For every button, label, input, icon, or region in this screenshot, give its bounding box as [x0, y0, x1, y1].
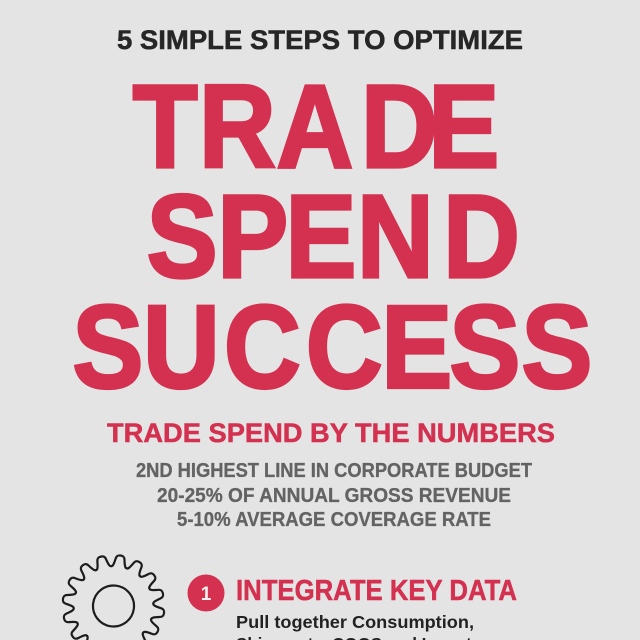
step 1 heading: INTEGRATE KEY DATA	[236, 575, 517, 607]
main title: TRADE	[133, 60, 499, 192]
step 1 description: Pull together Consumption,	[236, 612, 474, 632]
subheading: trade spend by the numbers: TRADE SPEND BY THE NUMBERS	[107, 418, 555, 448]
step 1 description	[236, 612, 498, 640]
statistics list: 20-25% OF ANNUAL GROSS REVENUE	[157, 485, 511, 507]
statistics list	[136, 460, 532, 531]
statistics list: 2ND HIGHEST LINE IN CORPORATE BUDGET	[136, 460, 532, 482]
step 1 number badge	[188, 574, 224, 612]
icon: gear	[56, 548, 171, 640]
main title	[72, 60, 592, 413]
step 1 number badge: 1	[201, 584, 212, 605]
statistics list: 5-10% AVERAGE COVERAGE RATE	[177, 509, 491, 531]
main title: SPEND	[147, 170, 520, 302]
eyebrow heading: 5 SIMPLE STEPS TO OPTIMIZE	[117, 25, 523, 55]
main title: SUCCESS	[72, 280, 592, 413]
